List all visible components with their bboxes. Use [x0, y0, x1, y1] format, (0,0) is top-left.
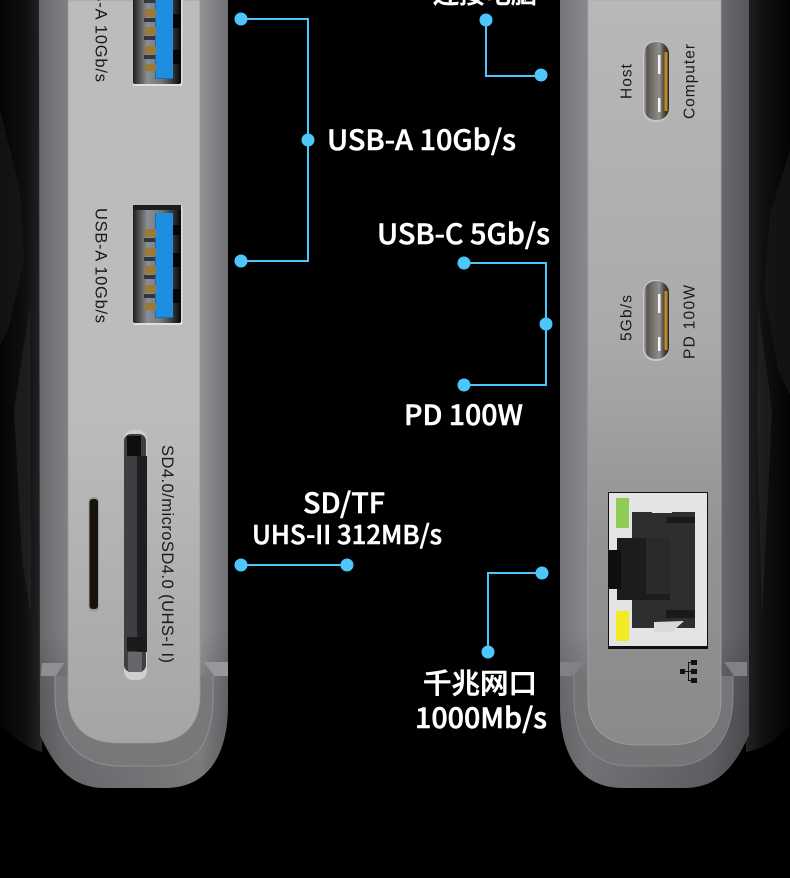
right device dark body [746, 0, 790, 752]
connector: USB-C and PD [458, 256, 552, 392]
connector: ethernet [482, 566, 548, 658]
left device rim steps [41, 662, 228, 766]
caption: PD 100W: PD 100W [404, 394, 523, 434]
left device dark body [0, 0, 42, 752]
caption: SD/TF: SD/TF [303, 482, 385, 522]
USB-C host port [643, 41, 669, 122]
left device face plate [68, 0, 200, 743]
SD card slot [124, 430, 147, 680]
connector: SD/TF [234, 558, 354, 572]
label PD 100W: PD 100W [682, 285, 698, 359]
right device: host, PD and ethernet side [560, 0, 790, 788]
label Computer: Computer [682, 44, 698, 119]
right device rim steps [560, 662, 747, 766]
caption: UHS-II 312MB/s: UHS-II 312MB/s [252, 515, 442, 552]
caption: 1000Mb/s: 1000Mb/s [415, 697, 547, 737]
left device metal frame [39, 0, 228, 788]
SD label: SD4.0/microSD4.0 (UHS-I I) [158, 445, 176, 663]
RJ45 ethernet port [608, 492, 708, 649]
connector: USB-A pair [234, 12, 314, 268]
USB-C PD port [643, 280, 669, 361]
port label lower: USB-A 10Gb/s [92, 208, 110, 323]
label 5Gb/s: 5Gb/s [618, 295, 636, 341]
icon: network symbol [680, 660, 697, 683]
microSD slot [88, 497, 99, 612]
right device metal frame [560, 0, 749, 788]
label Host: Host [618, 63, 636, 99]
USB-A port lower [133, 205, 182, 325]
right device face plate [588, 0, 721, 745]
caption: USB-A 10Gb/s: USB-A 10Gb/s [327, 119, 516, 159]
USB-A port upper [133, 0, 182, 86]
caption: USB-C 5Gb/s: USB-C 5Gb/s [377, 213, 550, 253]
connector: computer host [480, 14, 548, 82]
caption: gigabit port: 千兆网口 [423, 662, 537, 702]
left device: card reader and USB-A side [0, 0, 228, 788]
